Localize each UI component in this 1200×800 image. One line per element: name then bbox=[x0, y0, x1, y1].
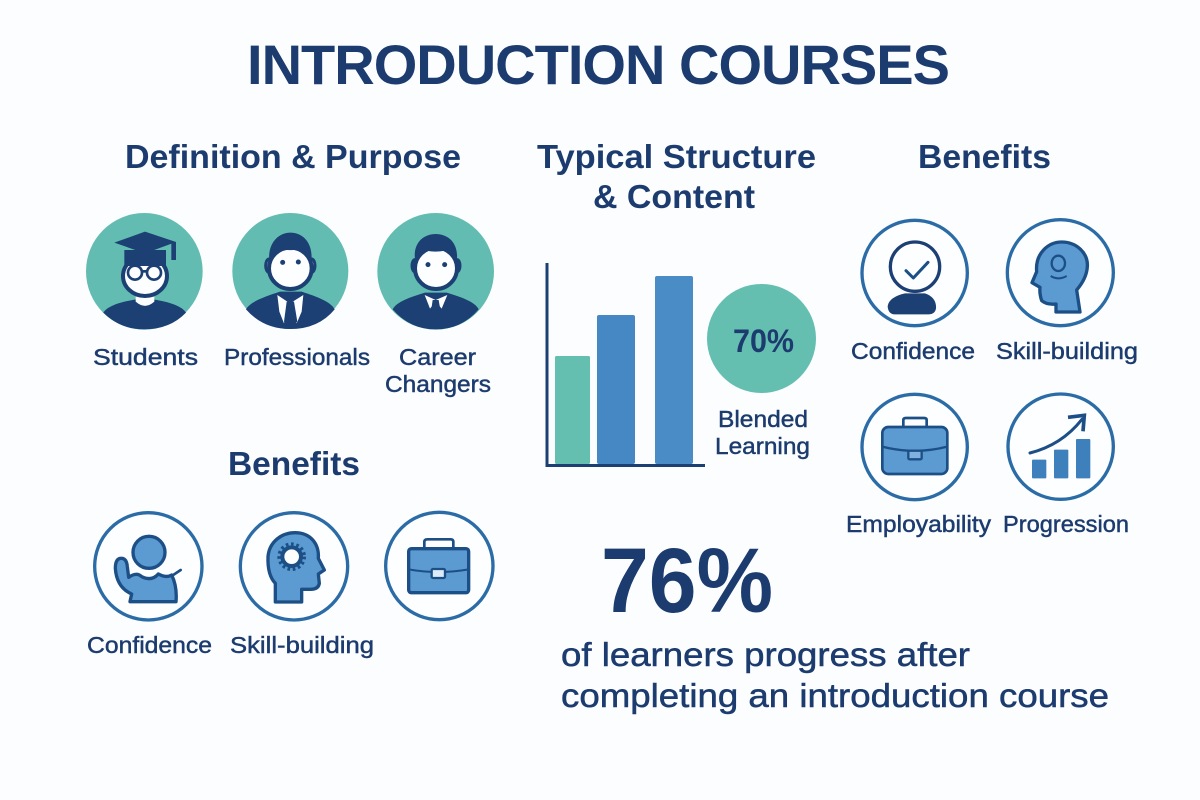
label: students: Students bbox=[93, 344, 198, 370]
label: confidence right: Confidence bbox=[851, 338, 975, 364]
panel: benefits right bbox=[846, 138, 1138, 537]
statistic: 76% of learners progress bbox=[561, 530, 1109, 714]
icon: confidence left bbox=[95, 513, 202, 620]
title: INTRODUCTION COURSES bbox=[247, 33, 950, 96]
statistic description: completing an introduction course bbox=[561, 677, 1109, 714]
label: confidence left: Confidence bbox=[87, 632, 212, 658]
panel: definition and purpose bbox=[86, 138, 494, 397]
icon: skill-building left bbox=[240, 513, 348, 620]
heading: benefits left: Benefits bbox=[228, 445, 360, 482]
heading: typical structure and content: Typical Structure bbox=[537, 138, 816, 175]
icon: students bbox=[86, 213, 203, 330]
statistic description: of learners progress after bbox=[561, 636, 970, 673]
panel: benefits left bbox=[87, 445, 493, 658]
bar chart bbox=[547, 263, 705, 466]
big number: 76% bbox=[601, 530, 773, 632]
label: skill-building right: Skill-building bbox=[996, 338, 1138, 364]
panel: typical structure and content bbox=[537, 138, 816, 466]
label: employability: Employability bbox=[846, 511, 992, 537]
heading: typical structure and content bbox=[537, 138, 816, 215]
icon: confidence right bbox=[862, 220, 967, 326]
label: skill-building left: Skill-building bbox=[230, 632, 374, 658]
statistic description bbox=[561, 636, 1109, 714]
icon: professionals bbox=[232, 213, 348, 329]
callout: 70% blended learning: Blended bbox=[718, 406, 808, 432]
icon: career changers bbox=[377, 213, 494, 330]
icon: employability right bbox=[862, 394, 967, 500]
icon: skill-building right bbox=[1007, 220, 1113, 326]
label: career changers bbox=[385, 344, 491, 397]
label: professionals: Professionals bbox=[224, 344, 370, 370]
label: progression: Progression bbox=[1003, 511, 1129, 537]
icon: progression right bbox=[1008, 394, 1113, 499]
callout: 70% blended learning: 70% bbox=[733, 323, 794, 359]
heading: typical structure and content: & Content bbox=[593, 178, 755, 215]
label: career changers: Changers bbox=[385, 371, 491, 397]
heading: definition and purpose: Definition & Purpose bbox=[125, 138, 461, 175]
callout: 70% blended learning: Learning bbox=[715, 433, 810, 459]
heading: benefits right: Benefits bbox=[918, 138, 1051, 175]
callout: 70% blended learning bbox=[707, 284, 816, 459]
icon: employability left bbox=[386, 512, 493, 620]
label: career changers: Career bbox=[399, 344, 476, 370]
